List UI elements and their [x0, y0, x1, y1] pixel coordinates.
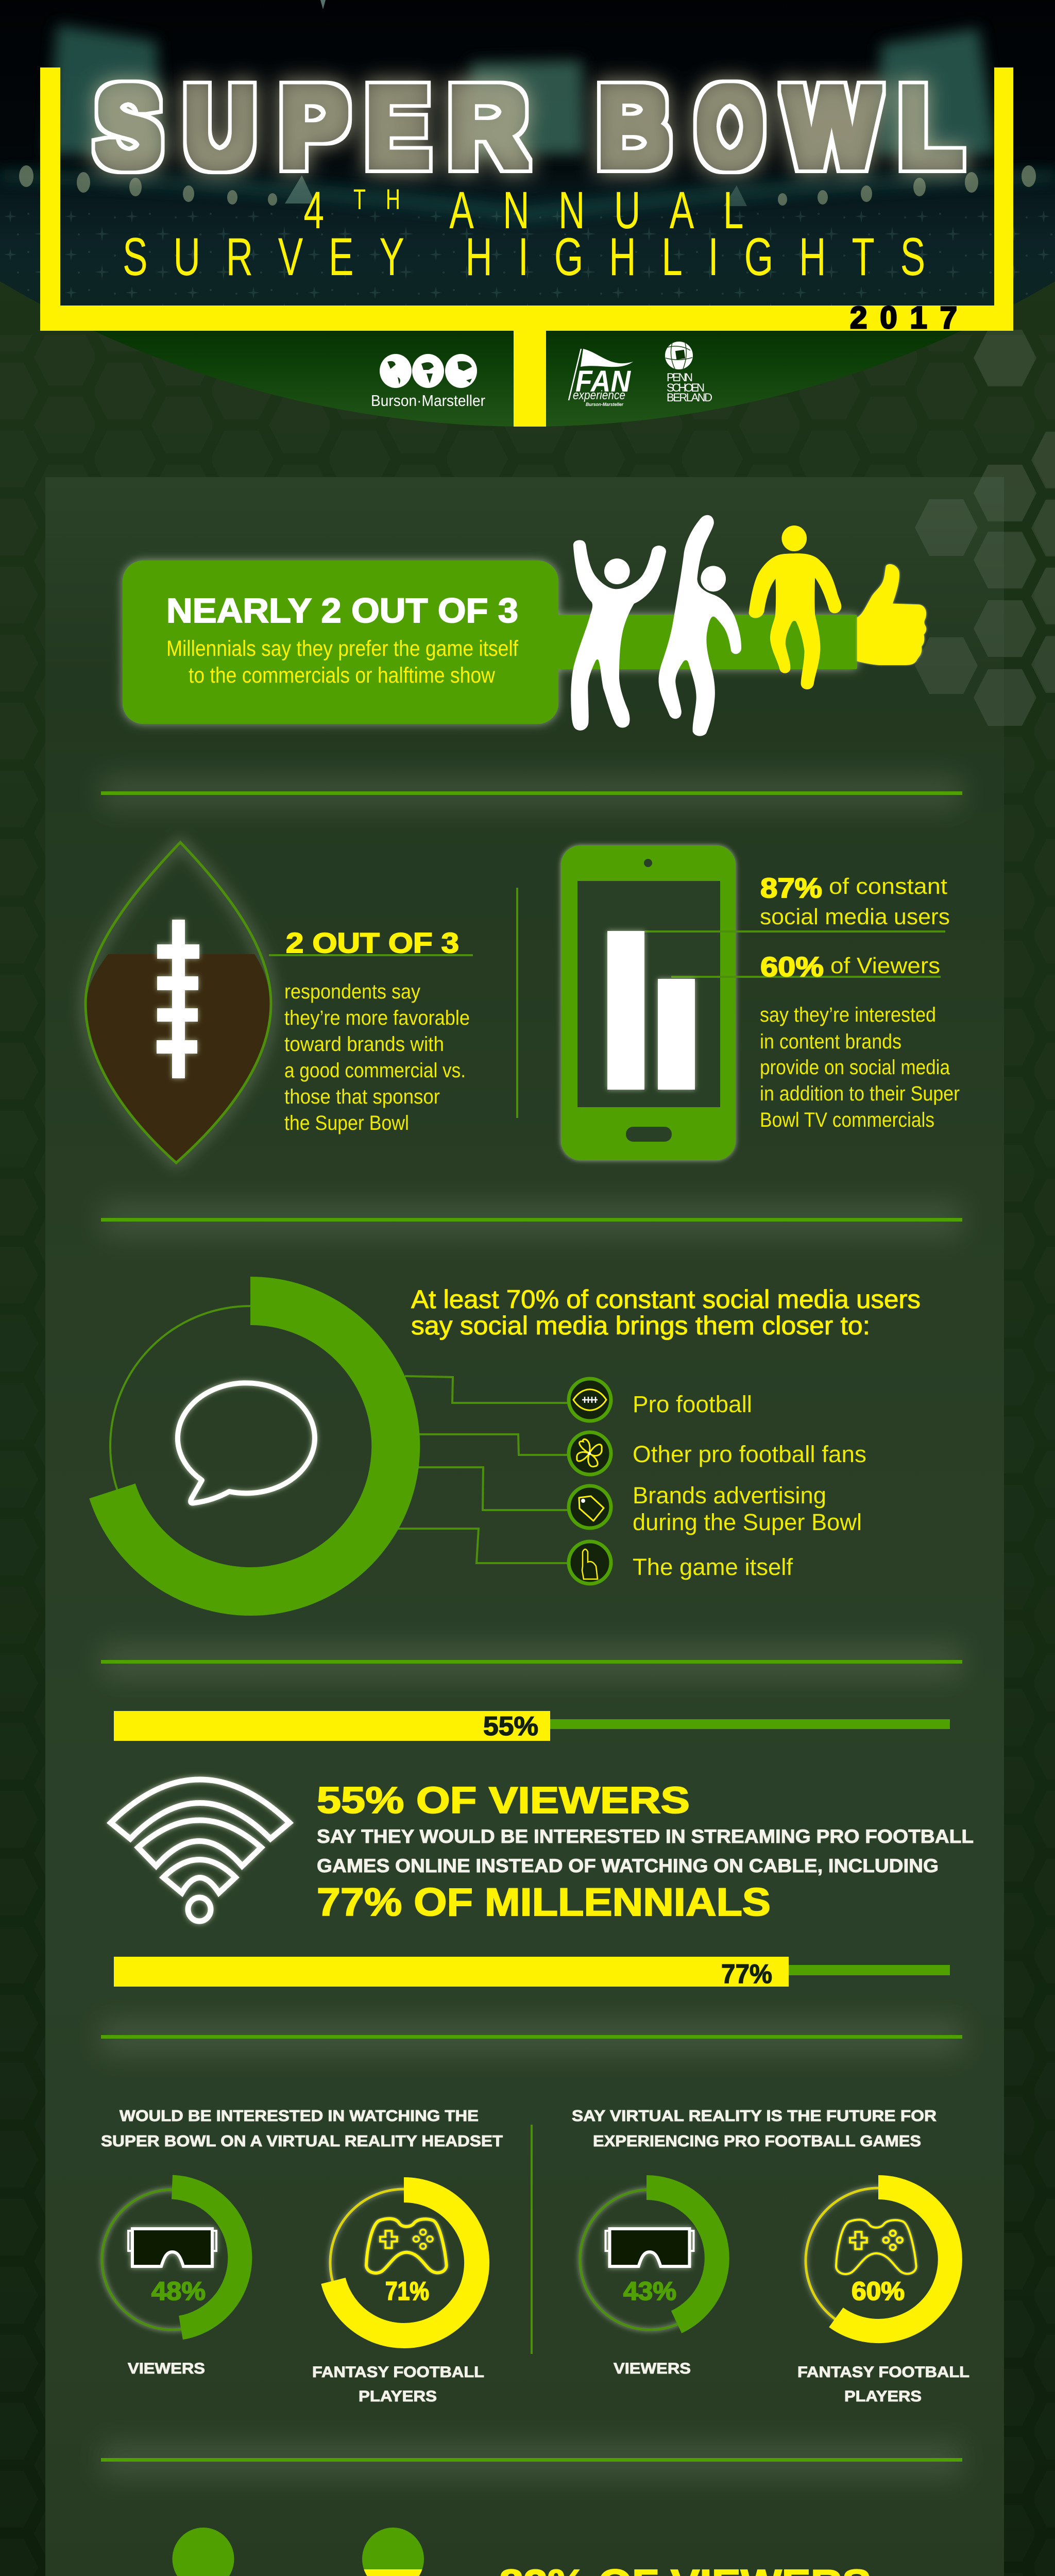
stat: 87 percent: of constant	[829, 874, 947, 899]
heading	[572, 2107, 937, 2150]
body text: they’re more favorable	[284, 1007, 470, 1029]
icon: person 1	[132, 2528, 277, 2576]
subtitle: 4th annual survey highlights: 4	[303, 180, 324, 240]
icon: speech bubble	[178, 1383, 315, 1503]
logo: Fan Experience: FAN	[575, 365, 631, 398]
chart: viewers 48 percent	[102, 2187, 242, 2330]
body text: those that sponsor	[284, 1086, 440, 1108]
body text	[284, 980, 470, 1134]
subtitle: 4th annual survey highlights	[123, 180, 925, 287]
title: SUPER BOWL: W	[785, 63, 879, 190]
chart: 70 percent donut	[110, 1301, 396, 1591]
heading: 2 OUT OF 3	[286, 927, 459, 959]
logo: Fan Experience	[569, 349, 633, 407]
title: SUPER BOWL: P	[280, 63, 348, 190]
divider	[101, 1645, 962, 1680]
body text	[317, 1826, 974, 1876]
heading: At least 70% of constant social media users	[411, 1285, 921, 1314]
title: SUPER BOWL: L	[899, 63, 962, 190]
connector lines	[398, 1376, 567, 1563]
logo: Penn Schoen Berland: BERLAND	[667, 391, 712, 404]
logo: Burson-Marsteller: Burson·Marsteller	[371, 392, 485, 410]
body text: respondents say	[284, 980, 420, 1003]
list item: brands advertising: during the Super Bowl	[633, 1509, 862, 1535]
subtitle: 4th annual survey highlights: ANNUAL	[449, 180, 743, 240]
icon: wifi	[111, 1780, 290, 1921]
callout: nearly 2 out of 3 band	[123, 515, 926, 736]
icon: game controller	[366, 2218, 447, 2273]
heading: SUPER BOWL ON A VIRTUAL REALITY HEADSET	[101, 2132, 503, 2150]
title: SUPER BOWL: B	[598, 63, 670, 190]
subtitle: 4th annual survey highlights: SURVEY HIGHLIGHTS	[123, 227, 925, 287]
heading: WOULD BE INTERESTED IN WATCHING THE	[120, 2107, 479, 2125]
divider	[101, 1202, 962, 1238]
list item: other fans	[569, 1432, 866, 1475]
body text: say they’re interested	[760, 1004, 936, 1026]
stat: 87 percent: 87%	[760, 873, 822, 904]
list item: pro football: Pro football	[633, 1391, 752, 1417]
panel: main content background	[45, 477, 1004, 2576]
label: fantasy football players	[797, 2364, 969, 2405]
bar chart: 77 percent	[114, 1957, 950, 1989]
bar chart: 55 percent	[114, 1711, 950, 1741]
logo: Penn Schoen Berland	[665, 342, 712, 404]
title: SUPER BOWL: S	[96, 63, 161, 190]
list item: the game itself	[569, 1541, 793, 1584]
icon: game controller	[836, 2219, 916, 2274]
panel: social media 70 percent	[110, 1285, 921, 1591]
panel: streaming statistics	[111, 1711, 974, 1989]
logo: Fan Experience: experience	[573, 388, 625, 402]
stat: 87 percent	[760, 873, 950, 929]
body text	[760, 1004, 960, 1131]
stat: 87 percent: social media users	[760, 904, 950, 929]
background hexagon cluster	[915, 330, 1055, 726]
body text: SAY THEY WOULD BE INTERESTED IN STREAMING PRO FOOTBALL	[317, 1826, 974, 1847]
logo: Penn Schoen Berland: PENN	[667, 371, 693, 384]
heading: SAY VIRTUAL REALITY IS THE FUTURE FOR	[572, 2107, 937, 2125]
label: viewers: VIEWERS	[614, 2360, 691, 2377]
list item: the game itself: The game itself	[633, 1554, 793, 1580]
panel: phone statistics	[561, 845, 960, 1160]
label: fantasy football players: FANTASY FOOTBALL	[312, 2364, 484, 2381]
chart: fantasy football players 60 percent	[806, 2188, 951, 2333]
label: viewers: VIEWERS	[128, 2360, 205, 2377]
callout text: to the commercials or halftime show	[189, 663, 496, 688]
chart: fantasy football players 71 percent: 71%	[385, 2277, 429, 2306]
body text: toward brands with	[284, 1033, 444, 1056]
divider	[101, 775, 962, 810]
panel: giving back	[172, 2528, 870, 2576]
body text: in addition to their Super	[760, 1082, 960, 1105]
icon: football	[86, 842, 271, 1163]
logo: Burson-Marsteller	[371, 354, 485, 410]
heading: NEARLY 2 OUT OF 3	[166, 591, 518, 630]
label: fantasy football players: FANTASY FOOTBALL	[797, 2364, 969, 2381]
divider	[101, 2443, 962, 2478]
header: stadium background	[0, 0, 1055, 427]
heading	[101, 2107, 503, 2150]
label: fantasy football players: PLAYERS	[844, 2388, 922, 2405]
bar chart: 55 percent: 55%	[483, 1711, 538, 1741]
divider	[101, 2020, 962, 2055]
chart: fantasy football players 60 percent: 60%	[852, 2277, 905, 2306]
title: SUPER BOWL: R	[448, 63, 528, 190]
list item: brands advertising	[569, 1482, 862, 1535]
goalpost	[40, 67, 1013, 427]
bar chart: 77 percent: 77%	[721, 1959, 772, 1989]
subtitle: 4th annual survey highlights: TH	[353, 183, 400, 216]
title: SUPER BOWL: O	[697, 63, 763, 190]
title: SUPER BOWL: U	[184, 63, 256, 190]
icon: VR headset	[606, 2229, 693, 2266]
chart: viewers 48 percent: 48%	[151, 2277, 206, 2306]
body text: GAMES ONLINE INSTEAD OF WATCHING ON CABLE, INCLUDING	[317, 1855, 939, 1876]
logo: Penn Schoen Berland: SCHOEN	[667, 381, 705, 394]
icon: cheering figures and thumbs up	[571, 515, 926, 736]
heading	[411, 1285, 921, 1340]
heading: 55 percent of viewers: 55% OF VIEWERS	[317, 1780, 690, 1821]
body text: a good commercial vs.	[284, 1059, 466, 1082]
callout text	[166, 636, 519, 688]
chart: viewers 43 percent: 43%	[623, 2277, 676, 2306]
chart: fantasy football players 71 percent	[330, 2189, 478, 2336]
logo: Fan Experience: Burson-Marsteller	[586, 402, 623, 407]
heading: EXPERIENCING PRO FOOTBALL GAMES	[593, 2132, 921, 2150]
list item: pro football	[569, 1379, 752, 1421]
heading: 77 percent of millennials: 77% OF MILLENNIALS	[317, 1880, 771, 1924]
stat: 60 percent: 60%	[760, 952, 824, 982]
panel: virtual reality future	[572, 2107, 969, 2405]
label: fantasy football players	[312, 2364, 484, 2405]
icon: person 2	[362, 2528, 424, 2576]
list item: other fans: Other pro football fans	[633, 1441, 866, 1467]
callout text: Millennials say they prefer the game itself	[166, 636, 519, 661]
body text: the Super Bowl	[284, 1112, 409, 1134]
chart: viewers 43 percent	[580, 2188, 720, 2330]
panel: virtual reality headset	[101, 2107, 503, 2405]
panel: football 2 out of 3	[86, 842, 473, 1163]
stat: 60 percent	[760, 952, 940, 982]
icon: VR headset	[128, 2229, 216, 2266]
body text: provide on social media	[760, 1056, 950, 1079]
title: SUPER BOWL: E	[366, 63, 429, 190]
year label: 2017	[850, 300, 957, 335]
stat: 60 percent: of Viewers	[830, 953, 940, 978]
body text: in content brands	[760, 1030, 901, 1053]
heading: say social media brings them closer to:	[411, 1311, 870, 1340]
body text: Bowl TV commercials	[760, 1109, 934, 1131]
icon: smartphone bar chart	[561, 845, 945, 1160]
list item: brands advertising: Brands advertising	[633, 1482, 826, 1509]
label: fantasy football players: PLAYERS	[359, 2388, 437, 2405]
